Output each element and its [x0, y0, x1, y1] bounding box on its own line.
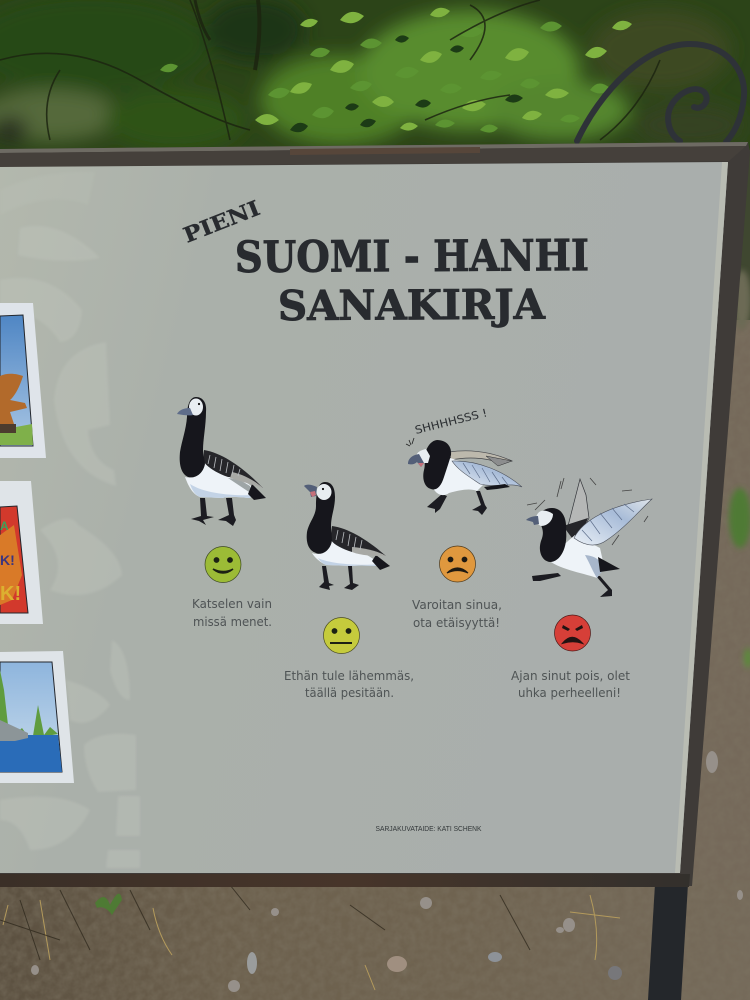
title: second line: SANAKIRJA: [278, 281, 546, 330]
goose 1 caption: [192, 596, 272, 629]
title: first line: SUOMI - HANHI: [235, 231, 589, 283]
goose 2 caption: täällä pesitään.: [305, 685, 394, 700]
curled iron ornament: [577, 44, 744, 142]
goose 1 caption: Katselen vain: [192, 596, 272, 611]
side card 2: red comic: K!: [0, 583, 21, 605]
illustrator credit: SARJAKUVATAIDE: KATI SCHENK: [376, 824, 482, 833]
iron post: [648, 884, 688, 1000]
goose 3 smiley: [440, 546, 476, 582]
side card 2: red comic: [0, 481, 43, 624]
sign panel: [0, 162, 728, 873]
goose 2 smiley: [324, 618, 360, 654]
goose 1: calm: [177, 397, 266, 526]
side card 3: lake landscape: [0, 651, 74, 783]
goose 4 caption: uhka perheelleni!: [518, 685, 621, 700]
goose 3: warning hiss: [406, 406, 522, 515]
background: ground: [0, 751, 750, 1000]
goose 3 caption: ota etäisyyttä!: [413, 615, 500, 630]
goose 3 caption: Varoitan sinua,: [412, 597, 502, 612]
side card 2: red comic: K!: [0, 552, 15, 568]
goose 2 caption: Ethän tule lähemmäs,: [284, 668, 414, 683]
background: foliage: [0, 0, 750, 165]
side card 2: red comic: A: [0, 519, 9, 533]
sign frame: [0, 142, 750, 887]
goose 4 caption: Ajan sinut pois, olet: [511, 668, 630, 683]
goose 2 caption: [284, 668, 414, 700]
goose 1 caption: missä menet.: [193, 614, 272, 629]
panel background decoration: [0, 172, 140, 868]
goose 4 smiley: [554, 615, 590, 651]
side card 1: dog comic: [0, 303, 46, 458]
goose 1 smiley: [205, 546, 241, 582]
goose 2: alert: [304, 482, 390, 590]
leaf on ground: [95, 894, 122, 915]
goose 3 caption: [412, 597, 502, 630]
sound label: hiss: SHHHHSSS !: [414, 406, 489, 437]
bright leaves: [160, 8, 632, 133]
title: pieni: PIENI: [180, 195, 263, 248]
title: [180, 195, 589, 330]
goose 4: attacking: [526, 478, 652, 597]
background: right side ground and bushes: [690, 150, 750, 1000]
goose 4 caption: [511, 668, 630, 700]
